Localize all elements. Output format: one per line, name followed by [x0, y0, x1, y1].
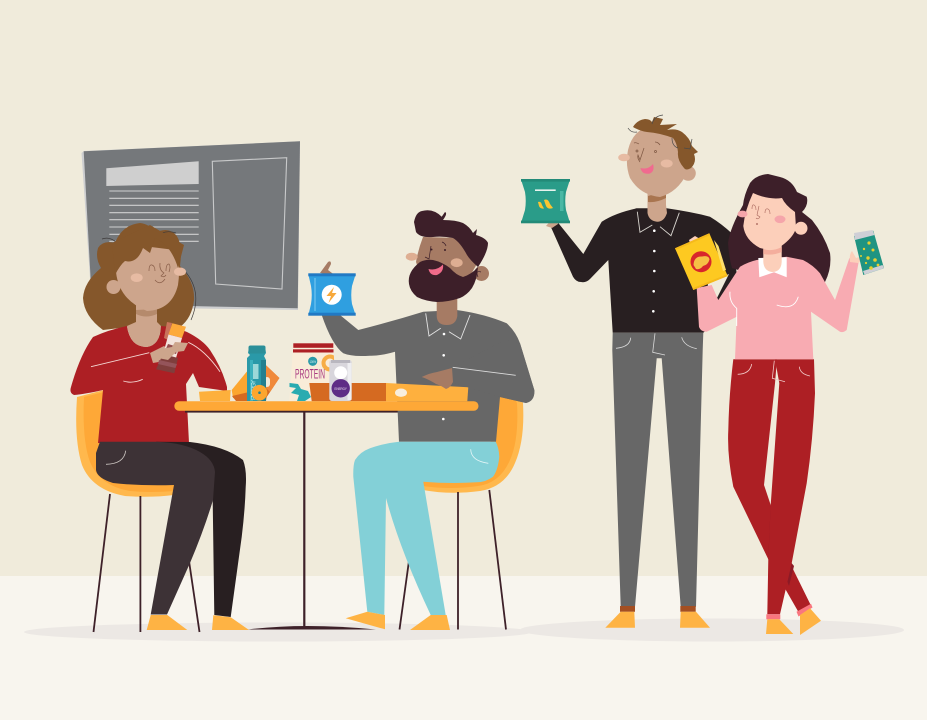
- pocket: [106, 451, 126, 464]
- fingers over bar: [158, 342, 188, 360]
- teal trousers: [353, 442, 499, 615]
- hand palm: [150, 346, 172, 363]
- table base and pole: [185, 410, 468, 630]
- face: [743, 193, 796, 249]
- forearm: [452, 340, 534, 403]
- sweater lines: [730, 292, 798, 326]
- collar: [637, 212, 679, 236]
- green chips bag: [521, 179, 570, 223]
- wall background: [0, 0, 927, 576]
- face details: [149, 263, 170, 283]
- hair fringe: [112, 225, 184, 275]
- hair: [633, 117, 698, 170]
- small yellow tray: [199, 390, 231, 401]
- neck shadow: [763, 247, 782, 255]
- cheeks: [618, 154, 673, 168]
- standing woman: [675, 174, 884, 635]
- hand: [546, 218, 558, 228]
- yellow chips bag: [675, 233, 728, 290]
- sweater highlight lines: [91, 342, 220, 382]
- back leg: [156, 442, 246, 617]
- ear: [794, 222, 808, 235]
- shoes: [346, 612, 450, 630]
- hair strands: [628, 115, 692, 149]
- left chair: [76, 390, 200, 632]
- shirt buttons: [652, 229, 656, 313]
- black shirt: [550, 208, 740, 333]
- protein pouch: [289, 343, 336, 401]
- face lines: [752, 205, 770, 225]
- snacks behind the man: box and pouch: [199, 343, 336, 401]
- finger: [320, 261, 336, 276]
- neck: [136, 305, 157, 333]
- wall gap beside the shirt: [705, 274, 729, 310]
- orange box: [232, 365, 279, 401]
- hand on tray: [422, 368, 453, 389]
- right hand: [850, 251, 866, 263]
- face lines: [634, 142, 660, 162]
- cheeks: [131, 268, 186, 282]
- hair back: [83, 223, 194, 332]
- red sweater: [70, 326, 227, 443]
- hair strands: [102, 232, 196, 320]
- right chair: [400, 366, 523, 630]
- green can: [854, 230, 884, 275]
- floor: [0, 576, 927, 720]
- collar: [426, 313, 470, 339]
- front leg: [96, 442, 215, 614]
- mouth: [640, 164, 654, 174]
- hair: [414, 210, 488, 267]
- face: [416, 237, 478, 285]
- face: [627, 128, 687, 197]
- red trousers front leg: [767, 359, 815, 614]
- grey trousers: [612, 333, 703, 607]
- beard: [409, 260, 478, 302]
- left hand: [689, 236, 700, 248]
- eyes: [430, 248, 446, 251]
- sleeve line: [453, 367, 516, 375]
- neck: [648, 190, 666, 216]
- blue chips bag: [308, 273, 356, 316]
- white collar: [758, 257, 787, 277]
- protein pouch: 100%: [310, 360, 317, 364]
- neck shadow: [136, 309, 157, 316]
- face: [116, 245, 179, 311]
- cheeks: [738, 211, 786, 223]
- chest skin: [127, 322, 161, 347]
- back leg shade: [768, 505, 794, 586]
- face lines: [425, 242, 481, 277]
- bearded man: [308, 210, 534, 630]
- shoes: [605, 612, 710, 628]
- trouser lines: [738, 361, 810, 382]
- woman eating a bar: [70, 223, 249, 630]
- table top: [174, 401, 479, 411]
- cheeks: [406, 253, 463, 267]
- tray and can on the table: [309, 360, 468, 401]
- long hair: [728, 174, 830, 290]
- shoes: [147, 615, 249, 630]
- ear: [474, 266, 489, 281]
- neck bottom: [648, 205, 667, 222]
- trouser lines: [616, 333, 697, 355]
- shirt buttons: [442, 333, 445, 420]
- energy bar: [156, 322, 186, 373]
- bearded man grey shirt body: [322, 310, 534, 442]
- red trousers back leg: [728, 359, 811, 612]
- silver energy can: [329, 360, 352, 401]
- wall notice board: [82, 141, 300, 310]
- protein pouch: PROTEIN: [295, 366, 325, 382]
- floor shadows: [24, 618, 904, 642]
- large tray: [309, 383, 468, 401]
- teal drink bottle: ENERGY: [252, 380, 258, 400]
- ear: [106, 280, 120, 294]
- shoes: [766, 608, 821, 635]
- neck: [437, 295, 457, 325]
- pink sweater: [697, 257, 859, 359]
- standing man: [521, 115, 740, 628]
- cuffs: [620, 606, 696, 612]
- neck shadow: [648, 191, 666, 202]
- neck: [763, 245, 782, 272]
- pink cuffs: [766, 604, 812, 619]
- ear: [681, 166, 696, 181]
- pocket: [471, 449, 488, 463]
- mouth: [428, 264, 443, 275]
- silver energy can: ENERGY: [334, 386, 347, 391]
